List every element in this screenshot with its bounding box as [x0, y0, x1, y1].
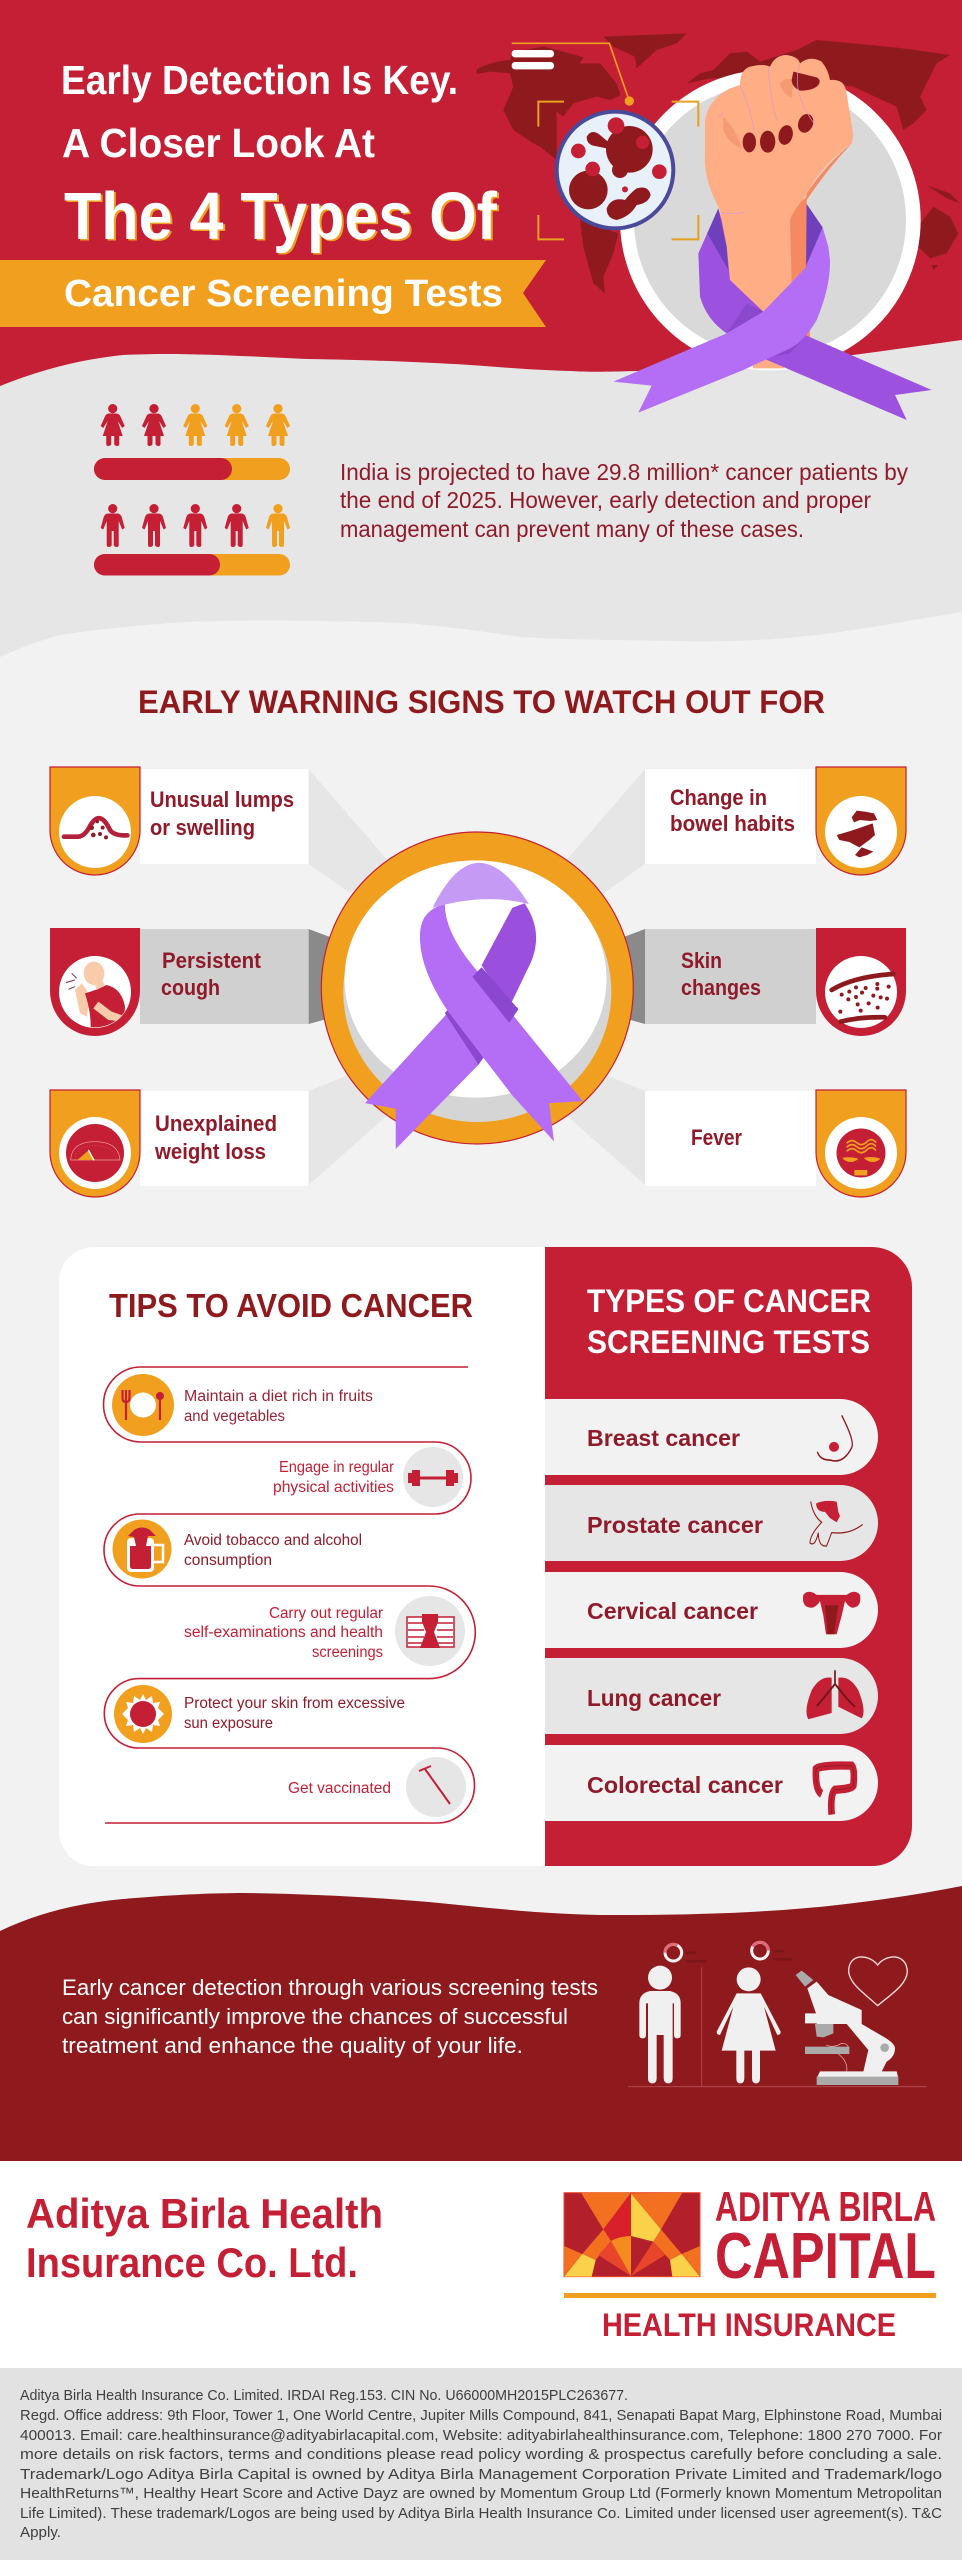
- intro text: management can prevent many of these cases.: [340, 516, 804, 542]
- row: cervical cancer: [545, 1572, 878, 1648]
- intro text: [340, 459, 908, 542]
- closing band: [0, 1886, 962, 2161]
- row: colorectal cancer: [545, 1745, 878, 1821]
- card: skin changes: changes: [681, 975, 761, 1000]
- central medallion: [321, 832, 633, 1144]
- logo subline: HEALTH INSURANCE: [602, 2307, 896, 2343]
- card: unusual lumps: or swelling: [150, 815, 255, 840]
- tip: sun exposure: [114, 1685, 405, 1743]
- disclaimer text: [20, 2387, 942, 2541]
- pictogram: women statistic: [94, 404, 290, 480]
- tip: tobacco and alcohol: consumption: [184, 1552, 272, 1569]
- hero illustration: [477, 33, 960, 420]
- intro text: the end of 2025. However, early detection and proper: [340, 487, 871, 513]
- disclaimer text: HealthReturns™, Healthy Heart Score and Active Dayz are owned by Momentum Group Ltd (Formerly known Momentum Metropolitan: [20, 2485, 942, 2502]
- disclaimer text: Regd. Office address: 9th Floor, Tower 1, One World Centre, Jupiter Mills Compound, 841, Senapati Bapat Marg, Elphinstone Road, Mumbai: [20, 2407, 942, 2424]
- card: persistent cough: Persistent: [162, 948, 262, 973]
- card: fever: [645, 1090, 906, 1197]
- tip: self-examinations: screenings: [312, 1644, 383, 1661]
- footer: white area: [0, 2161, 962, 2368]
- card: persistent cough: cough: [161, 975, 220, 1000]
- heading: tips: TIPS TO AVOID CANCER: [109, 1287, 473, 1324]
- tip: tobacco and alcohol: Avoid tobacco and alcohol: [184, 1532, 362, 1549]
- scan pointer line: [512, 43, 634, 106]
- target brackets: [538, 102, 698, 239]
- card: skin changes: [645, 928, 906, 1036]
- row: colorectal cancer: Colorectal cancer: [587, 1772, 783, 1798]
- company name: [26, 2190, 383, 2286]
- logo mark: [564, 2193, 700, 2277]
- tip: sun exposure: sun exposure: [184, 1715, 273, 1732]
- panel background: [59, 1247, 546, 1866]
- disclaimer panel: [0, 2368, 962, 2560]
- tip: vaccination: [288, 1757, 466, 1817]
- women icons: [101, 404, 290, 446]
- logo: aditya birla capital: [564, 2183, 936, 2343]
- card: persistent cough: [50, 928, 309, 1037]
- card: bowel habits: Change in: [670, 785, 767, 810]
- connector folds: [309, 769, 645, 1185]
- women bar: [94, 458, 290, 480]
- card: bowel habits: [645, 767, 906, 875]
- row: lung cancer: Lung cancer: [587, 1685, 721, 1711]
- row: breast cancer: [545, 1399, 878, 1475]
- title line 3: The 4 Types Of: [64, 179, 498, 254]
- tip: diet: [112, 1374, 373, 1436]
- menu bars: [512, 50, 554, 69]
- tip: self-examinations: Carry out regular: [269, 1605, 383, 1622]
- pictogram: men statistic: [94, 504, 290, 576]
- intro text: India is projected to have 29.8 million* cancer patients by: [340, 459, 908, 485]
- tip: diet: Maintain a diet rich in fruits: [184, 1388, 373, 1405]
- disclaimer text: more details on risk factors, terms and conditions please read policy wording & prospectus carefully before concluding a sale.: [20, 2446, 942, 2463]
- disclaimer text: Apply.: [20, 2524, 61, 2541]
- disclaimer text: Aditya Birla Health Insurance Co. Limited. IRDAI Reg.153. CIN No. U66000MH2015PLC263677.: [20, 2387, 628, 2404]
- icon: raised fist: [705, 55, 853, 368]
- card: unusual lumps: [50, 767, 309, 875]
- panel: tips to avoid cancer: [59, 1247, 546, 1866]
- icon: wrist ribbon: [613, 208, 932, 420]
- card: bowel habits: bowel habits: [670, 811, 795, 836]
- banner: [0, 260, 546, 327]
- men icons: [101, 504, 290, 547]
- closing text: [62, 1975, 598, 2058]
- icon: people and microscope: [628, 1942, 927, 2087]
- wave background: [0, 1886, 962, 2161]
- tip: tobacco and alcohol: [112, 1520, 362, 1578]
- company name: Insurance Co. Ltd.: [26, 2239, 358, 2286]
- heading: types: SCREENING TESTS: [587, 1324, 870, 1360]
- card: skin changes: Skin: [681, 948, 722, 973]
- heading: types: [587, 1283, 871, 1360]
- disclaimer text: Life Limited). These trademark/Logos are being used by Aditya Birla Health Insurance Co. Limited under licensed user agreement(s). T&C: [20, 2505, 942, 2522]
- banner ribbon shape: [0, 260, 546, 327]
- company name: Aditya Birla Health: [26, 2190, 383, 2237]
- tip: physical activities: Engage in regular: [279, 1459, 394, 1476]
- card: weight loss: [50, 1090, 309, 1197]
- tip: vaccination: Get vaccinated: [288, 1780, 391, 1797]
- closing text: can significantly improve the chances of successful: [62, 2004, 568, 2029]
- ribbon loop back: [790, 202, 823, 280]
- title: [61, 57, 500, 256]
- panel: types of cancer screening tests: [545, 1247, 912, 1866]
- banner text: Cancer Screening Tests: [64, 273, 503, 315]
- disclaimer text: Trademark/Logo Aditya Birla Capital is owned by Aditya Birla Management Corporation Private Limited and Trademark/logo: [20, 2466, 942, 2483]
- row: prostate cancer: Prostate cancer: [587, 1512, 763, 1538]
- tip: sun exposure: Protect your skin from excessive: [184, 1695, 405, 1712]
- card: unusual lumps: Unusual lumps: [150, 787, 294, 812]
- white and grey circle: [620, 70, 921, 370]
- row: cervical cancer: Cervical cancer: [587, 1598, 758, 1624]
- closing text: treatment and enhance the quality of your life.: [62, 2033, 523, 2058]
- disclaimer text: 400013. Email: care.healthinsurance@adityabirlacapital.com, Website: adityabirlahealthinsurance.com, Telephone: 1800 270 7000. For: [20, 2427, 942, 2444]
- tip: self-examinations: [184, 1596, 465, 1666]
- panel background: [545, 1247, 912, 1866]
- row: breast cancer: Breast cancer: [587, 1425, 740, 1451]
- hero red background: [0, 0, 962, 386]
- heading: types: TYPES OF CANCER: [587, 1283, 871, 1319]
- title line 3 shadow: The 4 Types Of: [66, 180, 500, 256]
- serpentine outline: [104, 1367, 475, 1823]
- title line 2: A Closer Look At: [62, 120, 375, 166]
- row: prostate cancer: [545, 1485, 878, 1561]
- row: lung cancer: [545, 1658, 878, 1734]
- card: weight loss: Unexplained: [155, 1111, 277, 1136]
- tip: self-examinations: self-examinations and health: [184, 1624, 383, 1641]
- card: fever: Fever: [691, 1125, 742, 1150]
- heading: early warning signs: EARLY WARNING SIGNS TO WATCH OUT FOR: [138, 684, 825, 720]
- world map: [477, 33, 960, 293]
- card: weight loss: weight loss: [154, 1139, 266, 1164]
- closing text: Early cancer detection through various screening tests: [62, 1975, 598, 2000]
- men bar: [94, 554, 290, 576]
- tip: physical activities: [273, 1447, 463, 1507]
- disclaimer background: [0, 2368, 962, 2560]
- icon: central awareness ribbon: [365, 863, 583, 1149]
- grey wave band: [0, 300, 962, 657]
- icon: petri dish with cells: [557, 112, 673, 228]
- title line 1: Early Detection Is Key.: [61, 57, 458, 103]
- tip: diet: and vegetables: [184, 1408, 285, 1425]
- tip: physical activities: physical activities: [273, 1479, 394, 1496]
- logo rule: [564, 2293, 936, 2298]
